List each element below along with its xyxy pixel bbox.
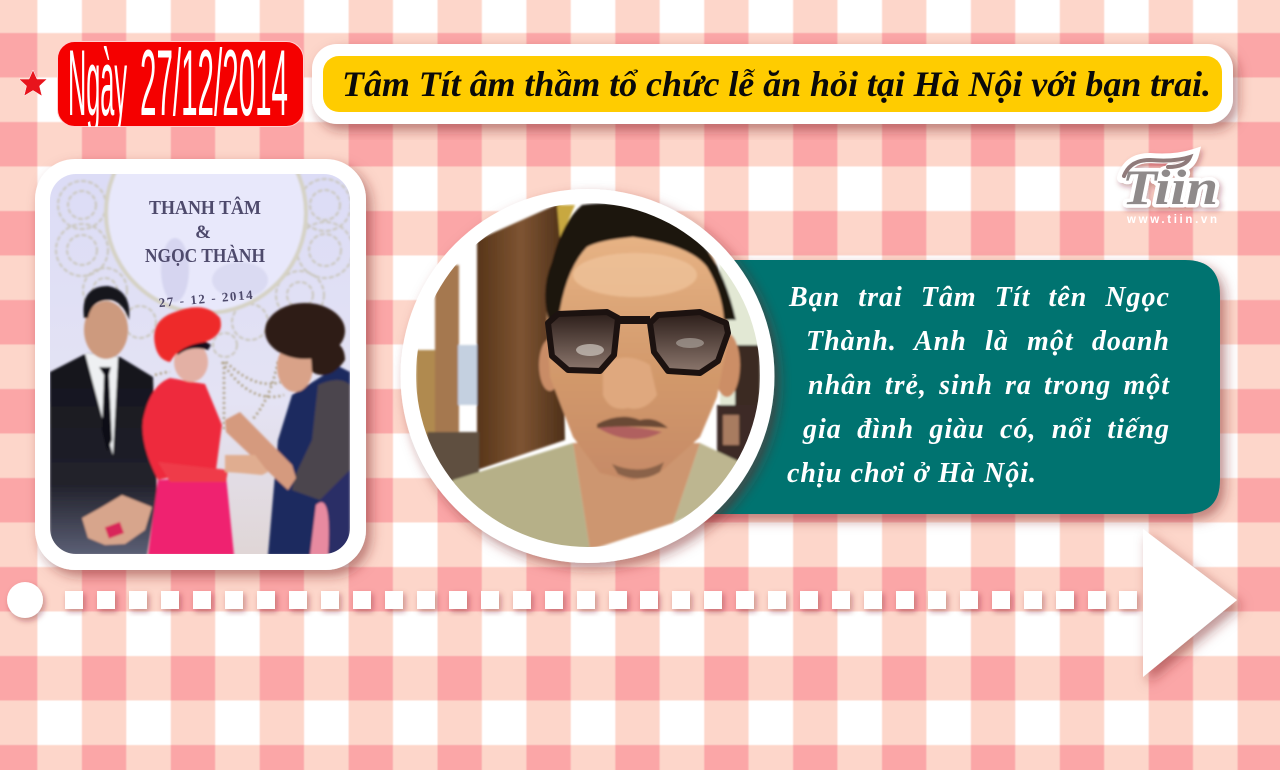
text block: boyfriend description — [787, 282, 1170, 489]
portrait frame — [400, 189, 774, 563]
arrow head — [1143, 529, 1237, 677]
sunglasses — [548, 312, 728, 373]
woman — [268, 366, 350, 555]
panel: engagement photo — [35, 113, 366, 570]
text block: boyfriend description: chịu chơi ở Hà Nội. — [787, 458, 1037, 489]
text block: boyfriend description: gia đình giàu có, nổi tiếng — [803, 414, 1170, 445]
text block: boyfriend description: Thành. Anh là một doanh — [806, 326, 1170, 357]
man — [50, 353, 157, 555]
logo: Tiin: www.tiin.vn — [1126, 214, 1217, 226]
text: 27/12/2014 — [140, 30, 288, 135]
panel: portrait photo — [400, 189, 774, 563]
dotted line — [65, 591, 1137, 609]
icon: red star — [19, 70, 47, 96]
photo: man in sunglasses — [416, 203, 760, 550]
backdrop names — [145, 195, 265, 310]
photo: engagement ceremony — [50, 174, 350, 554]
logo: Tiin — [1122, 154, 1218, 226]
timeline — [7, 529, 1237, 677]
photo frame — [35, 159, 366, 570]
date badge: Ngày — [68, 30, 127, 135]
text block: boyfriend description: Bạn trai Tâm Tít tên Ngọc — [789, 282, 1170, 313]
heading banner: Tâm Tít âm thầm tổ chức lễ ăn hỏi tại Hà Nội với bạn trai. — [342, 64, 1211, 104]
text block: boyfriend description: nhân trẻ, sinh ra trong một — [808, 370, 1170, 401]
heading banner — [312, 44, 1233, 124]
backdrop names: & — [195, 222, 211, 243]
backdrop names: 27 - 12 - 2014 — [158, 287, 254, 310]
bride — [148, 476, 234, 555]
timeline start dot — [7, 582, 43, 618]
backdrop names: NGỌC THÀNH — [145, 244, 265, 267]
logo: Tiin: Tiin — [1122, 159, 1218, 215]
backdrop names: THANH TÂM — [149, 195, 261, 219]
panel: teal info box — [690, 260, 1220, 514]
